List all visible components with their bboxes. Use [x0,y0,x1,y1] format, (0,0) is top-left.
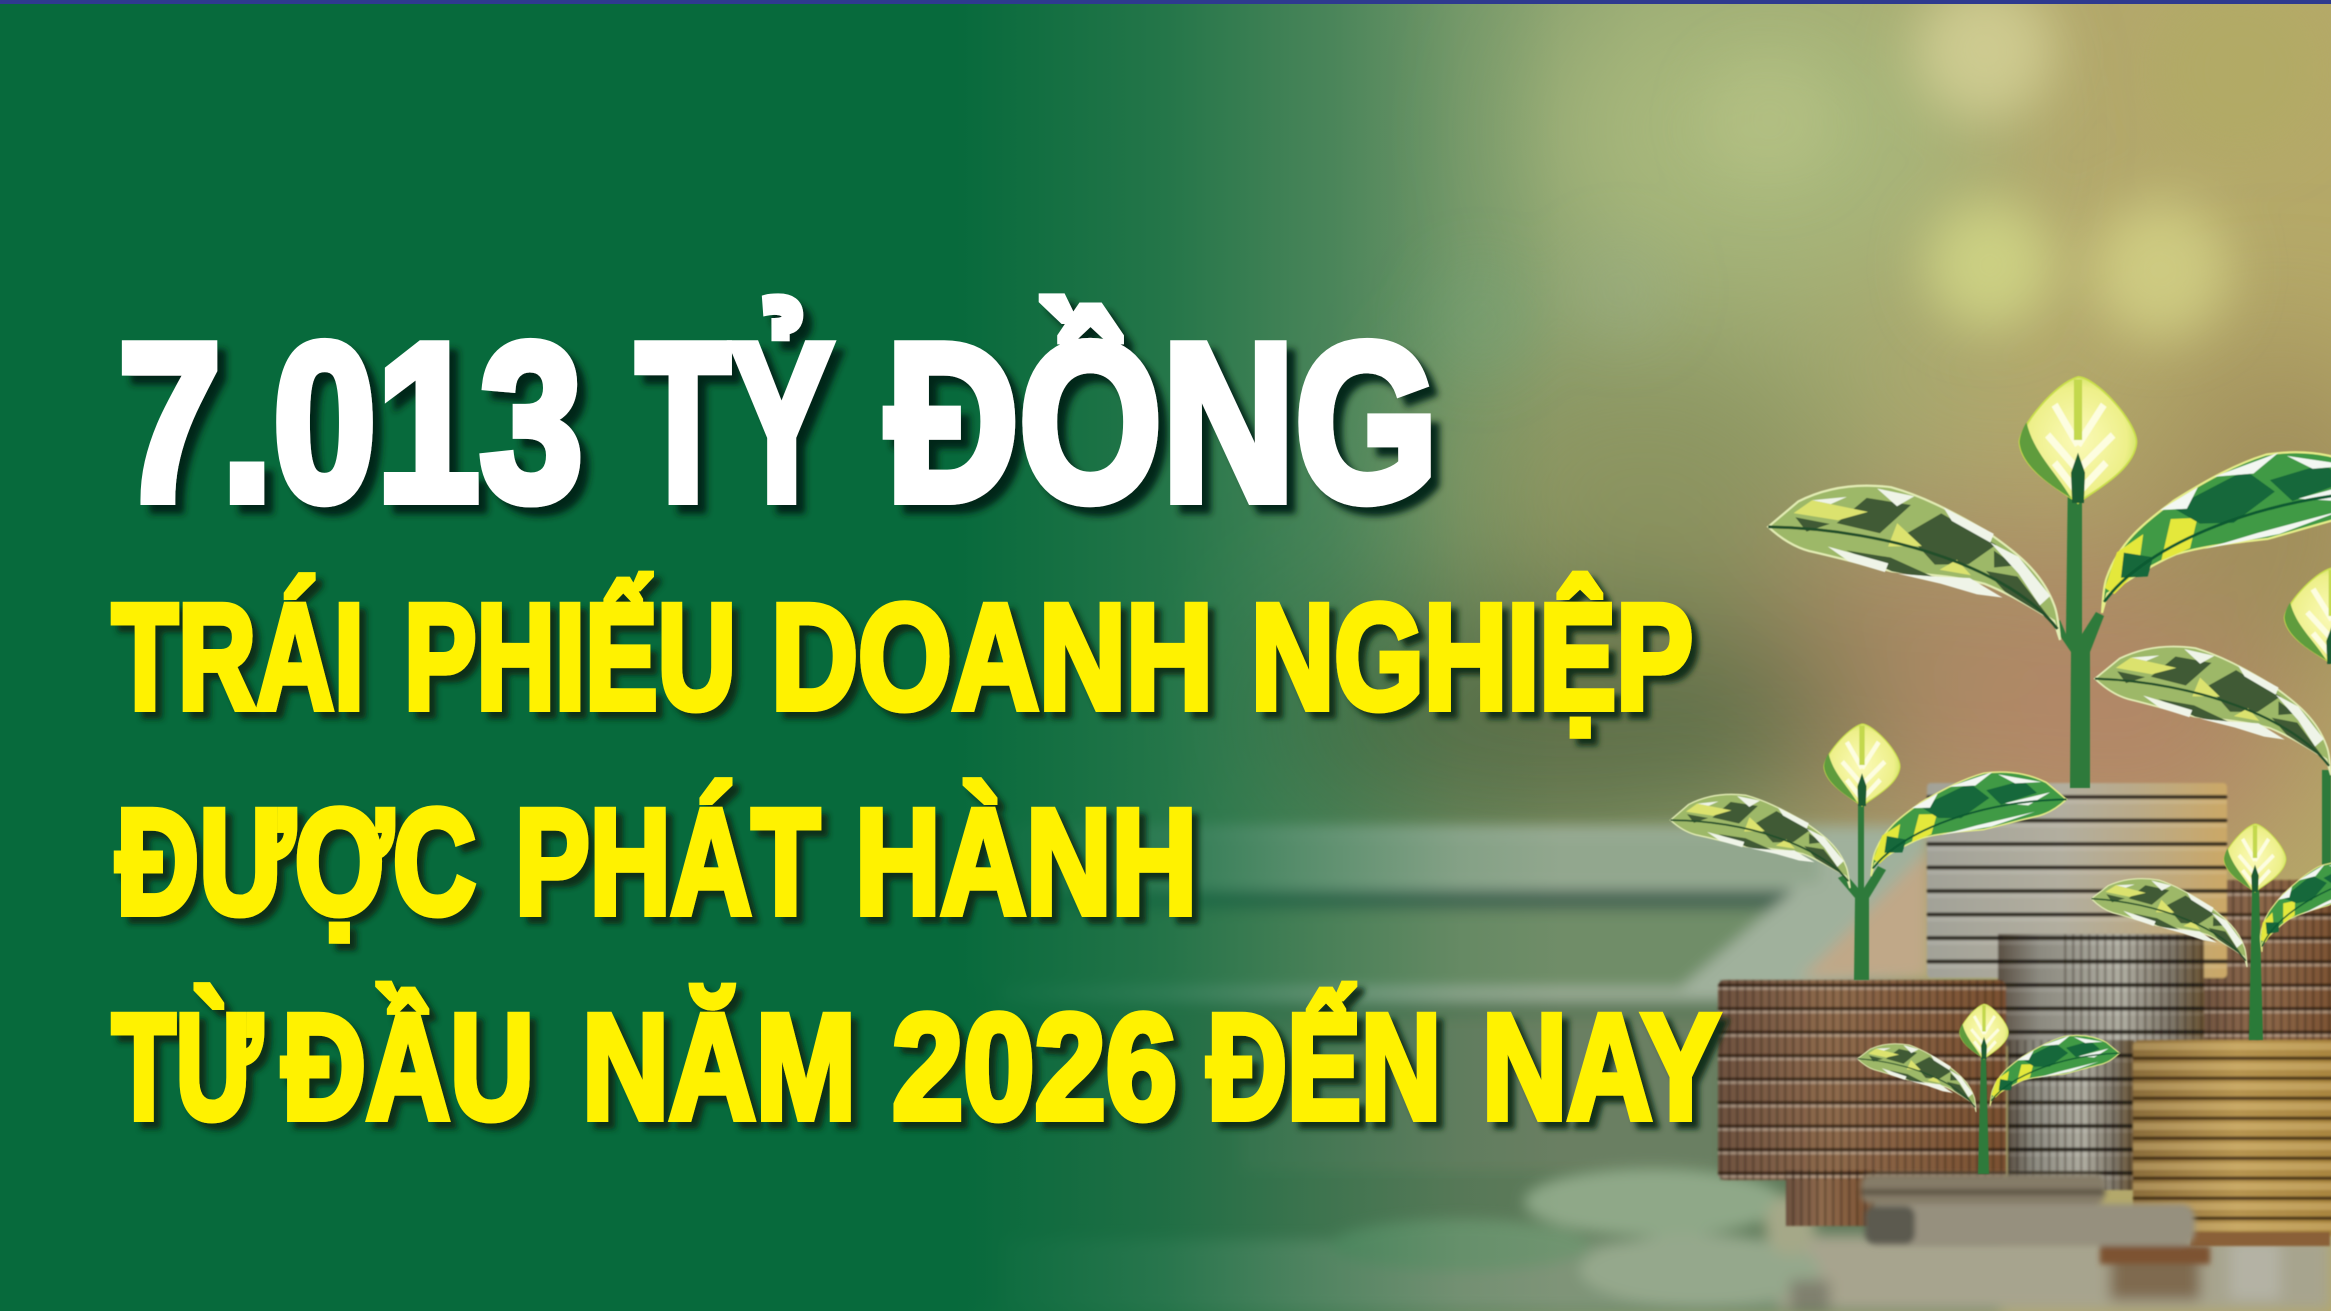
coins: upper silver stack [1927,783,2227,978]
title line 4: yellow subtitle: ĐẾN [1207,982,1441,1150]
title line 1: white headline [118,296,1438,548]
photo: blurred bokeh background [900,0,2331,1311]
seedling: large centre plant [1765,377,2331,788]
coins: left bronze stack [1718,980,2006,1226]
coins: lower silver stack [2008,1040,2134,1190]
title line 2: yellow subtitle: PHIẾU [404,572,736,740]
title line 4: yellow subtitle: NĂM [582,982,856,1150]
seedling: front small plant [1856,1004,2121,1174]
illustration: seedlings [1669,377,2331,1174]
coins: back bronze stack [2200,880,2331,1040]
coins: front flat coins [1861,1174,2210,1264]
title line 2: yellow subtitle [112,572,1693,740]
title line 1: white headline: TỶ [636,296,833,548]
coins: middle silver stack [1998,934,2204,1046]
title line 3: yellow subtitle: HÀNH [855,778,1197,946]
title line 3: yellow subtitle: PHÁT [515,778,820,946]
photo: blurred foreground coins [1000,1168,2331,1311]
coins: gold stack [2133,1040,2331,1246]
title line 4: yellow subtitle: 2026 [892,982,1177,1150]
seedling: left plant [1669,724,2069,980]
title line 3: yellow subtitle: ĐƯỢC [116,778,476,946]
title line 2: yellow subtitle: NGHIỆP [1251,572,1693,740]
illustration: coin stacks [1718,783,2331,1246]
title line 3: yellow subtitle [116,778,1197,946]
seedling: right small plant [2090,824,2331,1040]
title line 4: yellow subtitle: ĐẦU [282,982,534,1150]
photo: blurred tablet and desk [900,826,2000,1311]
title line 4: yellow subtitle: TỪ [112,982,262,1150]
title line 1: white headline: ĐỒNG [886,296,1438,548]
title line 2: yellow subtitle: DOANH [771,572,1213,740]
title line 4: yellow subtitle [112,982,1720,1150]
title line 2: yellow subtitle: TRÁI [112,572,364,740]
top border [0,0,2331,4]
title block [112,296,1720,1150]
title line 1: white headline: 7.013 [118,296,583,548]
title line 4: yellow subtitle: NAY [1482,982,1720,1150]
seedling: right edge plant [2092,568,2331,880]
